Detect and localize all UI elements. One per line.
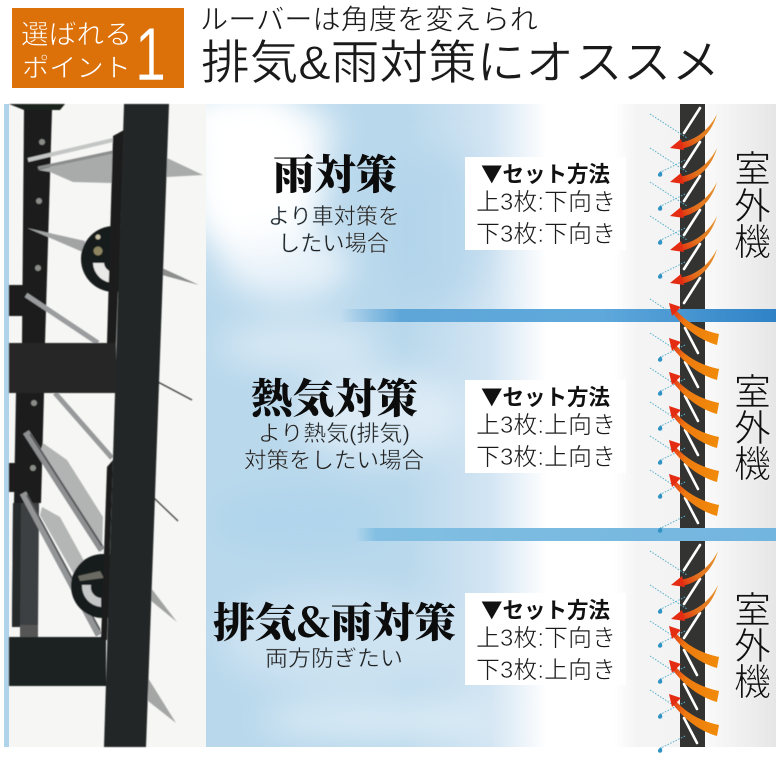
label: outdoor unit 3 [734, 590, 771, 703]
louver slats [23, 140, 203, 723]
front post [107, 130, 124, 343]
setting box 1: 上3枚:下向き [476, 189, 616, 216]
louver diagram: rain section [650, 104, 717, 309]
label: outdoor unit 2: 機 [734, 444, 771, 485]
label: outdoor unit 2: 外 [734, 408, 771, 449]
panel: right side outdoor unit background [705, 104, 776, 747]
setting box 2 [465, 380, 626, 473]
setting box 3: ▼セット方法 [481, 593, 610, 625]
label: outdoor unit 3: 室 [734, 590, 771, 631]
label: outdoor unit 1: 室 [734, 149, 771, 190]
louver diagram: heat section [650, 299, 719, 533]
setting box 3 [465, 593, 626, 685]
text: rain description: したい場合 [278, 231, 389, 256]
label: outdoor unit 2: 室 [734, 372, 771, 413]
setting box 1: 下3枚:下向き [476, 221, 616, 248]
setting box 1 [465, 157, 626, 250]
crossbars [9, 343, 116, 393]
label: outdoor unit 2 [734, 372, 771, 485]
sky background panel [175, 85, 680, 747]
blue divider bands [340, 309, 776, 541]
setting box 3: 下3枚:上向き [476, 657, 616, 684]
heading: rain: 雨対策 [273, 142, 397, 201]
text: heat description: 対策をしたい場合 [244, 448, 424, 473]
label: outdoor unit 1 [734, 149, 771, 263]
text: heat description [244, 421, 424, 473]
setting box 2: 下3枚:上向き [476, 444, 616, 471]
label: outdoor unit 1: 機 [734, 222, 771, 263]
setting box 2: 上3枚:上向き [476, 412, 616, 439]
header badge: 選ばれるポイント1: 選ばれる [21, 20, 132, 50]
photo: louver frame [4, 104, 206, 747]
text: rain description [268, 204, 400, 256]
header badge: 選ばれるポイント1: 1 [135, 12, 166, 96]
label: outdoor unit 3: 機 [734, 662, 771, 703]
pivot wheels [81, 226, 147, 292]
text: exhaust and rain description: 両方防ぎたい [265, 646, 403, 671]
heading: heat: 熱気対策 [251, 366, 418, 425]
main title: 排気&雨対策にオススメ [201, 36, 720, 89]
louver diagram: exhaust and rain section [650, 541, 719, 753]
heading: exhaust and rain: 排気&雨対策 [213, 590, 456, 649]
label: outdoor unit 3: 外 [734, 626, 771, 667]
header subtitle: ルーバーは角度を変えられ [200, 4, 538, 35]
setting box 3: 上3枚:下向き [476, 625, 616, 652]
setting box 2: ▼セット方法 [481, 380, 610, 412]
header badge: 選ばれるポイント1 [12, 8, 184, 96]
text: rain description: より車対策を [268, 204, 400, 229]
bolts [30, 139, 45, 471]
label: outdoor unit 1: 外 [734, 186, 771, 227]
setting box 1: ▼セット方法 [481, 157, 610, 189]
header badge: 選ばれるポイント1: ポイント [22, 53, 131, 83]
text: heat description: より熱気(排気) [258, 421, 410, 446]
rear posts [9, 104, 65, 637]
